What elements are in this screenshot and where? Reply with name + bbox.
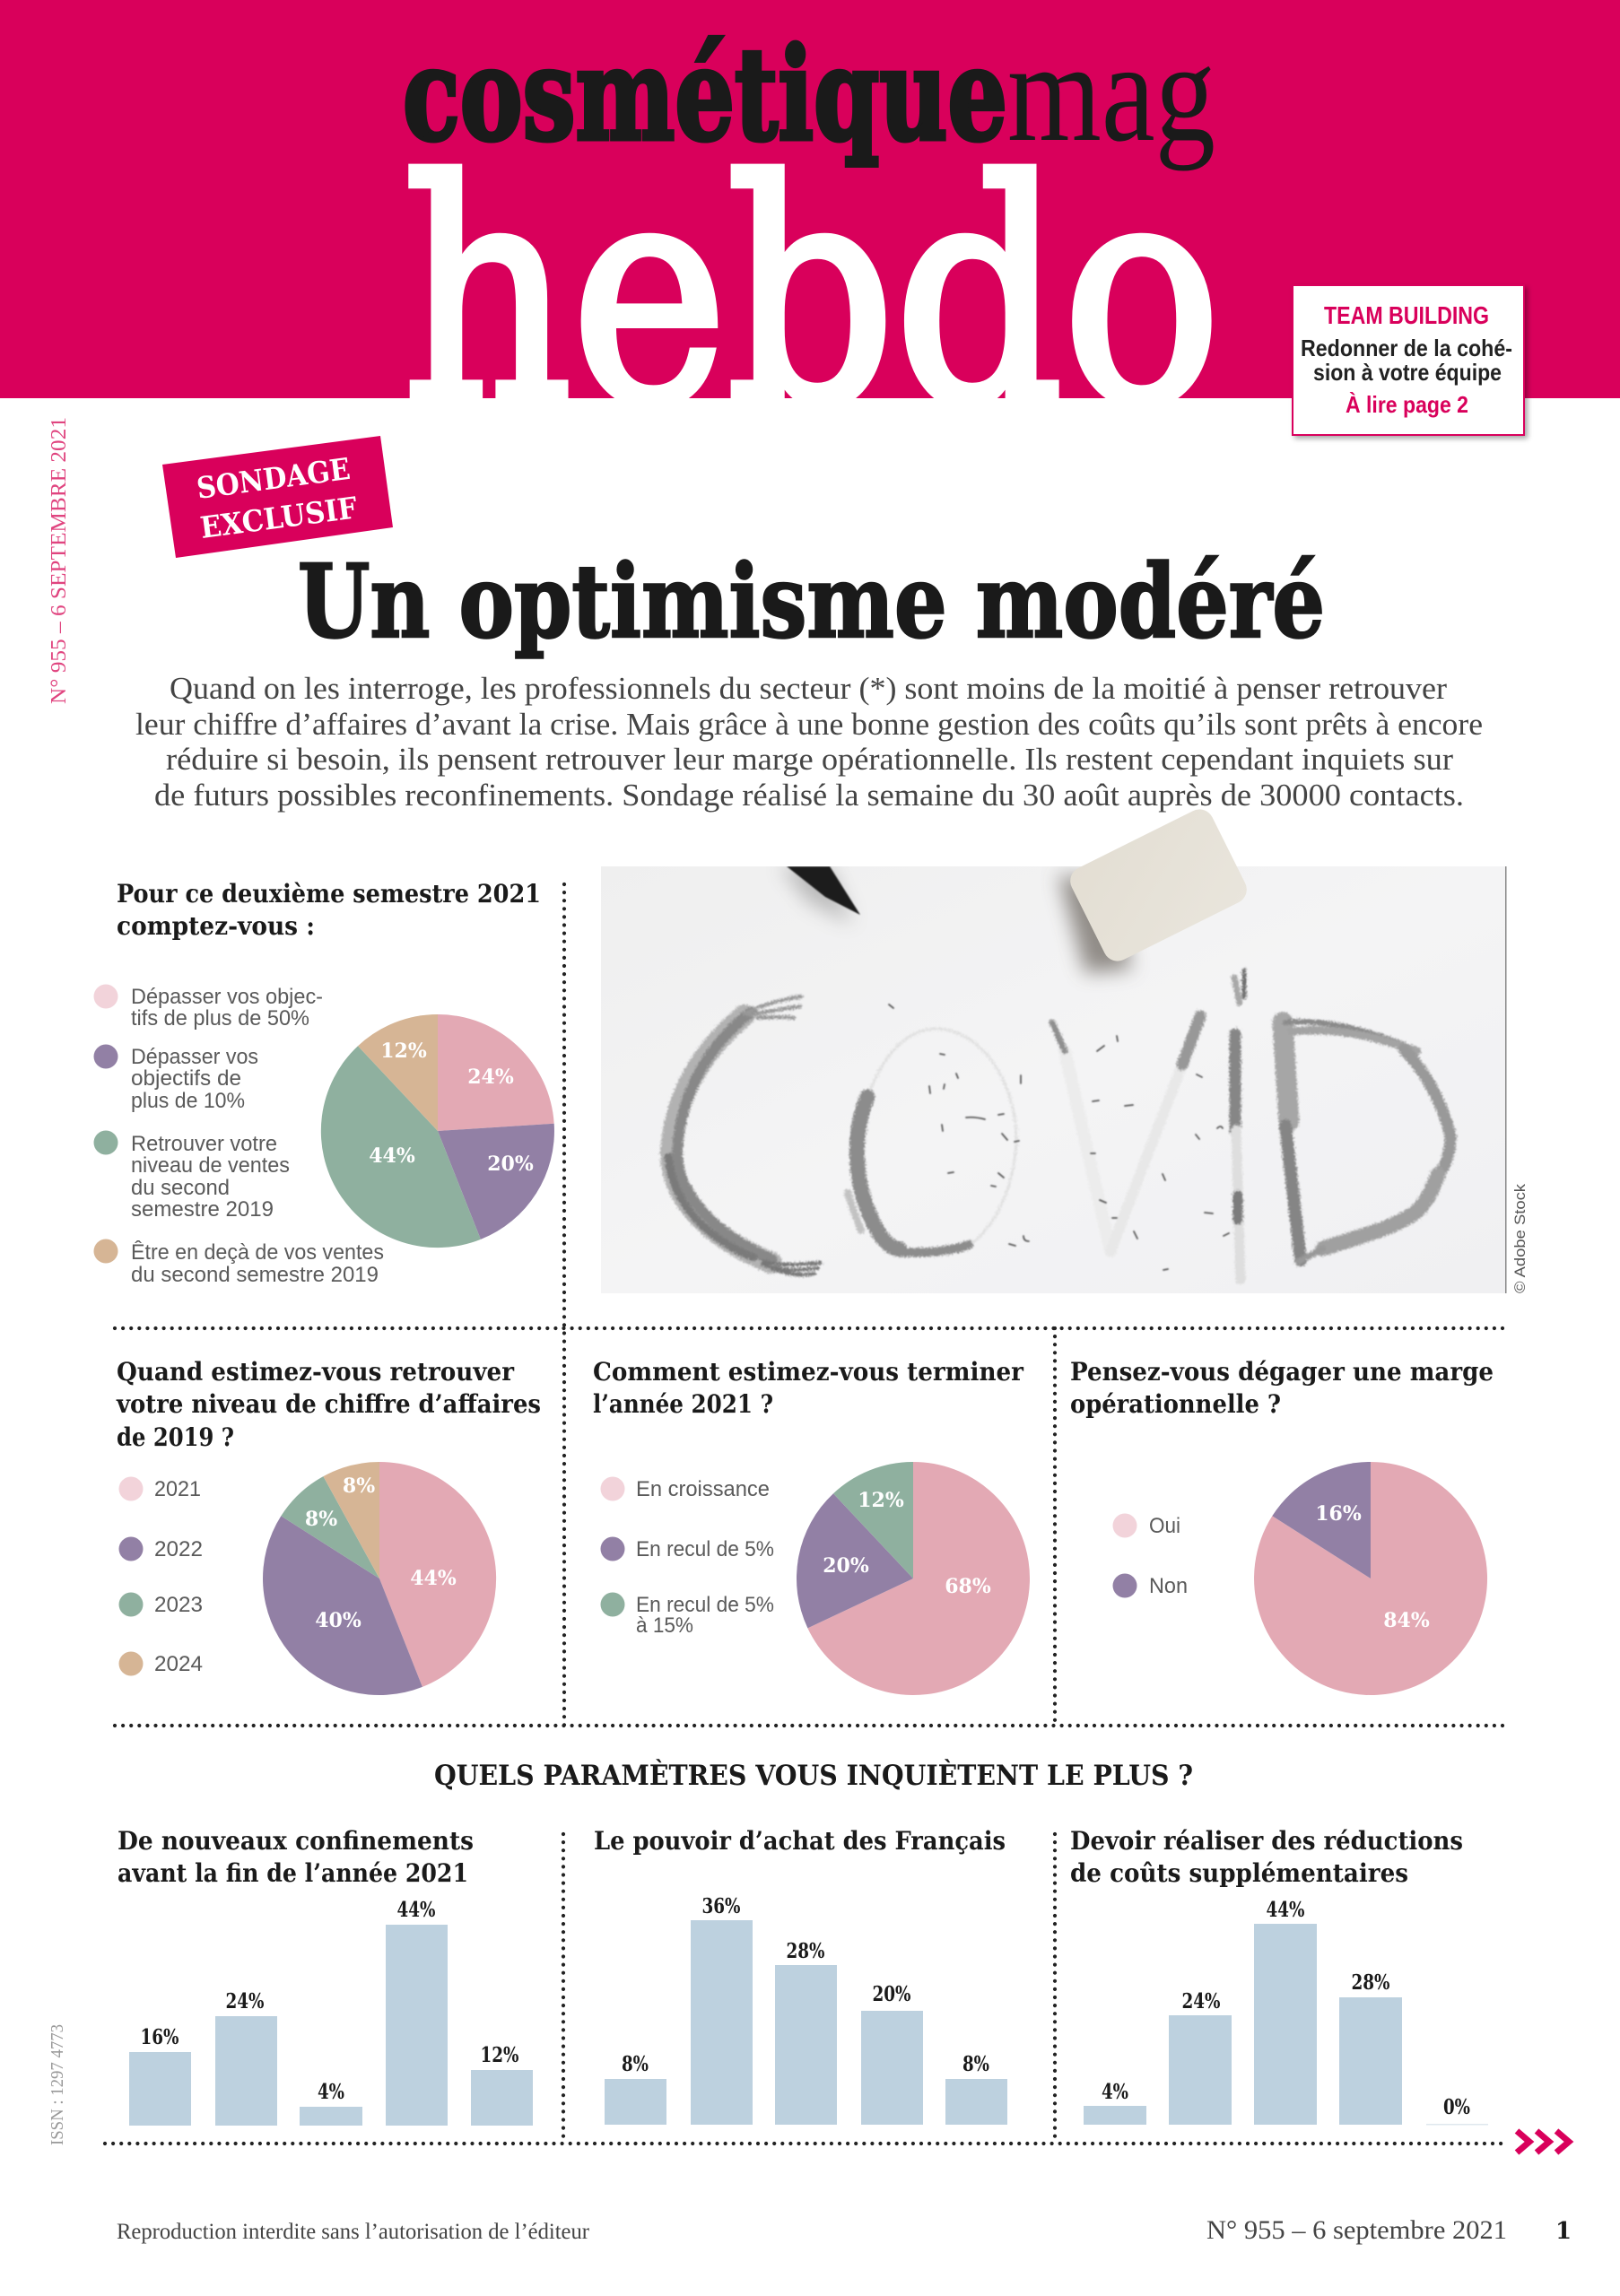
bars: 28%: [1351, 1970, 1390, 1995]
panel: bar chart, cost reductions: [1070, 1826, 1488, 2126]
panel: pie chart, margin: [1070, 1357, 1494, 1695]
pie chart: 44%: [410, 1567, 457, 1590]
callout: team building: [1293, 285, 1524, 435]
bars: 44%: [1267, 1898, 1305, 1922]
legend: 2021: [154, 1477, 201, 1501]
legend: 2022: [154, 1537, 203, 1561]
intro paragraph: leur chiffre d’affaires d’avant la crise. Mais grâce à une bonne gestion des coûts qu’ils sont prêts à encore: [135, 707, 1483, 742]
bars: 20%: [872, 1982, 911, 2006]
panel: pie chart, second semester: [93, 879, 554, 1287]
legend: 2024: [154, 1652, 203, 1676]
footer: issue: N° 955 – 6 septembre 2021: [1206, 2215, 1507, 2245]
masthead: cosmétiquemag: mag: [1007, 12, 1215, 171]
legend: [93, 985, 384, 1287]
bars: 4%: [1102, 2080, 1128, 2104]
masthead: hebdo: hebdo: [403, 117, 1221, 473]
intro paragraph: de futurs possibles reconfinements. Sondage réalisé la semaine du 30 août auprès de 30000 contacts.: [154, 778, 1464, 813]
badge: sondage exclusif: SONDAGE: [195, 451, 353, 506]
legend: Être en deçà de vos ventes: [131, 1240, 384, 1265]
heading: votre niveau de chiffre d’affaires: [116, 1389, 541, 1419]
pie chart: 68%: [945, 1575, 991, 1598]
legend: En croissance: [636, 1477, 770, 1501]
legend: Retrouver votre: [131, 1132, 277, 1156]
panel: pie chart, end of year: [593, 1357, 1030, 1695]
panel: bar chart, purchasing power: [594, 1826, 1007, 2125]
legend: [118, 1476, 203, 1676]
legend: [601, 1476, 774, 1638]
masthead: cosmétiquemag: cosmétique: [403, 21, 1007, 170]
bars: 36%: [701, 1894, 741, 1918]
bars: [1084, 1898, 1488, 2126]
panel: pie chart, recovery year: [116, 1357, 541, 1695]
legend: du second: [131, 1176, 230, 1200]
legend: du second semestre 2019: [131, 1263, 379, 1287]
intro paragraph: Quand on les interroge, les professionnels du secteur (*) sont moins de la moitié à penser retrouver: [170, 671, 1447, 706]
bars: 8%: [622, 2052, 649, 2076]
heading: Le pouvoir d’achat des Français: [594, 1826, 1006, 1856]
heading: opérationnelle ?: [1070, 1389, 1281, 1419]
legend: [1112, 1514, 1188, 1598]
arrow: continue: [1517, 2131, 1569, 2152]
title: Un optimisme modéré: [298, 544, 1325, 661]
legend: Dépasser vos: [131, 1045, 258, 1069]
pie chart: 20%: [487, 1152, 534, 1176]
bars: 12%: [481, 2043, 519, 2067]
intro paragraph: réduire si besoin, ils pensent retrouver leur marge opérationnelle. Ils restent cependant inquiets sur: [166, 742, 1453, 777]
legend: à 15%: [636, 1613, 693, 1638]
pie chart: 44%: [369, 1144, 415, 1168]
bars: [129, 1898, 533, 2126]
badge: sondage exclusif: [162, 436, 393, 558]
badge: sondage exclusif: EXCLUSIF: [198, 490, 360, 545]
legend: tifs de plus de 50%: [131, 1006, 309, 1031]
header band: [0, 0, 1620, 398]
bars: 44%: [396, 1898, 436, 1922]
legend: semestre 2019: [131, 1197, 274, 1222]
bars: 24%: [226, 1989, 265, 2013]
heading: de coûts supplémentaires: [1070, 1858, 1408, 1888]
pie chart: [263, 1462, 496, 1695]
credit: © Adobe Stock: [1511, 1183, 1529, 1293]
heading: avant la fin de l’année 2021: [118, 1858, 468, 1888]
pie chart: 12%: [380, 1039, 427, 1063]
pie chart: 20%: [823, 1554, 869, 1578]
callout: team building: À lire page 2: [1346, 391, 1468, 418]
legend: Oui: [1149, 1514, 1180, 1538]
callout: team building: TEAM BUILDING: [1324, 301, 1489, 329]
intro paragraph: [135, 671, 1483, 813]
heading: l’année 2021 ?: [593, 1389, 773, 1419]
heading: Comment estimez-vous terminer: [593, 1357, 1024, 1387]
pie chart: 24%: [467, 1065, 514, 1089]
pie chart: 16%: [1315, 1502, 1362, 1526]
legend: 2023: [154, 1593, 203, 1617]
heading: Pour ce deuxième semestre 2021: [117, 879, 541, 909]
bars: 0%: [1443, 2095, 1470, 2119]
heading: [116, 1357, 541, 1452]
bars: 24%: [1182, 1989, 1221, 2013]
legend: objectifs de: [131, 1066, 241, 1091]
footer: copyright: Reproduction interdite sans l’autorisation de l’éditeur: [117, 2220, 590, 2244]
heading: [593, 1357, 1024, 1419]
heading: Pensez-vous dégager une marge: [1070, 1357, 1494, 1387]
heading: de 2019 ?: [117, 1422, 234, 1452]
callout: team building: sion à votre équipe: [1313, 359, 1502, 386]
pie chart: 84%: [1383, 1609, 1430, 1632]
pie chart: [321, 1014, 554, 1248]
side issn: ISSN : 1297 4773: [48, 2024, 67, 2145]
pie chart: 12%: [858, 1489, 904, 1512]
heading: [1070, 1357, 1494, 1419]
heading: Devoir réaliser des réductions: [1070, 1826, 1463, 1856]
bars: [605, 1894, 1007, 2125]
callout: team building: Redonner de la cohé-: [1301, 335, 1512, 361]
bars: 8%: [962, 2052, 989, 2076]
bars: 28%: [786, 1939, 825, 1963]
pie chart: [797, 1462, 1030, 1695]
panel: bar chart, confinements: [118, 1826, 533, 2126]
bars: 16%: [140, 2025, 179, 2049]
side date: N° 955 – 6 SEPTEMBRE 2021: [48, 417, 71, 704]
legend: plus de 10%: [131, 1089, 245, 1113]
legend: En recul de 5%: [636, 1593, 774, 1617]
heading: [118, 1826, 474, 1888]
heading: Quand estimez-vous retrouver: [117, 1357, 515, 1387]
section heading: QUELS PARAMÈTRES VOUS INQUIÈTENT LE PLUS ?: [434, 1758, 1193, 1792]
pie chart: [1254, 1462, 1487, 1695]
footer: page number: 1: [1555, 2218, 1572, 2245]
pie chart: 8%: [305, 1508, 337, 1531]
legend: En recul de 5%: [636, 1537, 774, 1561]
photo: covid pencil drawing with eraser: [601, 804, 1507, 1293]
legend: niveau de ventes: [131, 1153, 290, 1178]
pie chart: 8%: [343, 1474, 375, 1498]
bars: 4%: [318, 2080, 344, 2104]
legend: Non: [1149, 1574, 1188, 1598]
heading: comptez-vous :: [117, 911, 315, 941]
legend: Dépasser vos objec-: [131, 985, 323, 1009]
heading: De nouveaux confinements: [118, 1826, 474, 1856]
heading: [117, 879, 541, 941]
heading: [1070, 1826, 1463, 1888]
pie chart: 40%: [315, 1609, 361, 1632]
